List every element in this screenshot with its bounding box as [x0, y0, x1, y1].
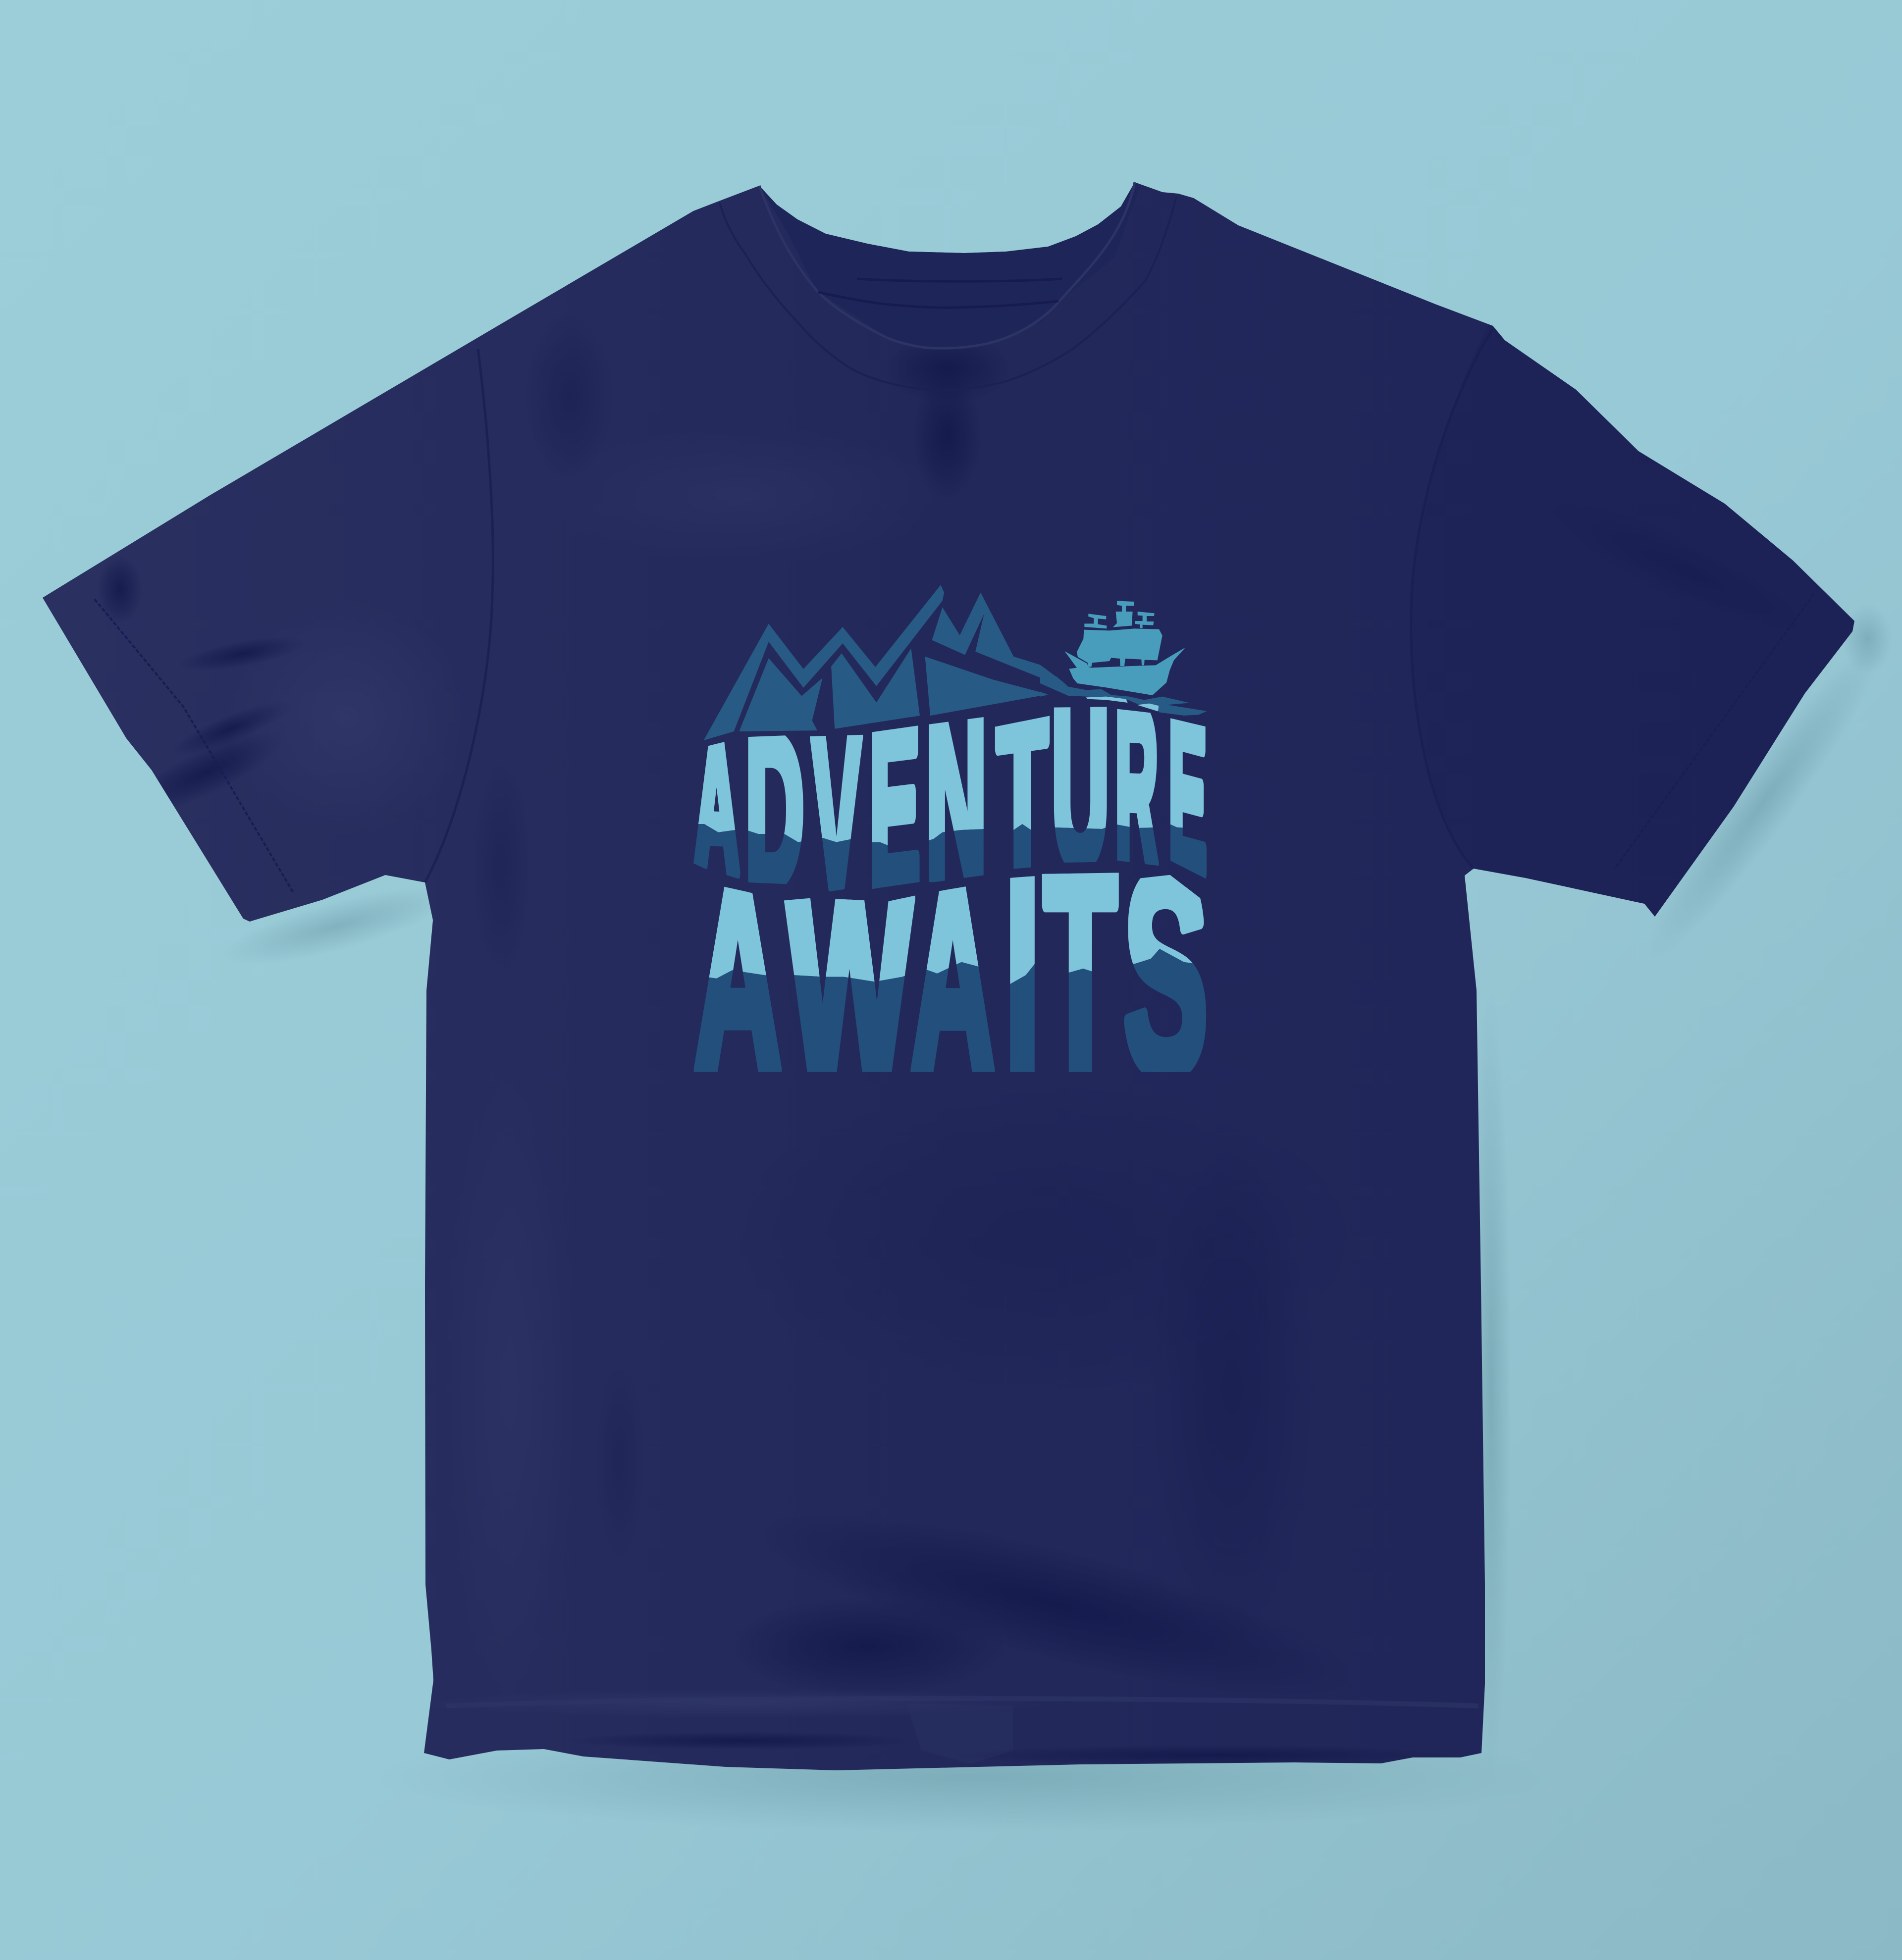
- ADVENTURE light upper half: E: [869, 677, 920, 936]
- right sleeve darker panel: [1411, 297, 1882, 941]
- ADVENTURE light upper half: U: [1052, 659, 1109, 912]
- neck interior: [759, 182, 1139, 348]
- ADVENTURE dark lower half: E: [869, 677, 920, 936]
- ADVENTURE light upper half: R: [1115, 662, 1158, 913]
- AWAITS dark lower half: [694, 811, 1208, 1133]
- ADVENTURE light upper half: E: [1168, 671, 1207, 919]
- AWAITS light upper half: A: [694, 830, 782, 1126]
- ADVENTURE light upper half: [693, 659, 1207, 938]
- ADVENTURE dark lower half: V: [812, 688, 861, 938]
- ADVENTURE light upper half: T: [997, 671, 1048, 918]
- t-shirt: [43, 182, 1882, 1770]
- ADVENTURE light upper half: V: [812, 688, 861, 938]
- AWAITS dark lower half: S: [1123, 815, 1208, 1133]
- ADVENTURE dark lower half: R: [1115, 662, 1158, 913]
- ADVENTURE light upper half: D: [745, 691, 804, 928]
- ADVENTURE dark lower half: U: [1052, 659, 1109, 912]
- ADVENTURE light upper half: A: [693, 702, 740, 913]
- ADVENTURE dark lower half: [693, 659, 1207, 938]
- hem stitching: [446, 1699, 1479, 1706]
- AWAITS dark lower half: A: [694, 830, 782, 1126]
- heading: ADVENTURE: [693, 659, 1207, 938]
- AWAITS dark lower half: T: [1044, 811, 1117, 1131]
- ship silhouette: [1064, 601, 1185, 695]
- hem fold: [906, 1703, 1013, 1764]
- AWAITS dark lower half: W: [787, 844, 913, 1124]
- heading: AWAITS: [694, 811, 1208, 1133]
- foam: [1086, 697, 1159, 712]
- AWAITS dark lower half: A: [911, 830, 995, 1127]
- mountains: [704, 585, 1069, 740]
- graphic print: Adventure Awaits: [693, 585, 1208, 1133]
- sleeve seams: [95, 594, 1814, 893]
- AWAITS light upper half: W: [787, 844, 913, 1124]
- AWAITS light upper half: S: [1123, 815, 1208, 1133]
- AWAITS light upper half: A: [911, 830, 995, 1127]
- AWAITS light upper half: T: [1044, 811, 1117, 1131]
- armhole seams: [425, 329, 1492, 882]
- collar inner edge: [759, 182, 1135, 348]
- AWAITS dark lower half: I: [1005, 816, 1040, 1131]
- waves: [1040, 669, 1207, 716]
- ADVENTURE dark lower half: E: [1168, 671, 1207, 919]
- back collar stitching: [818, 279, 1062, 308]
- ADVENTURE dark lower half: D: [745, 691, 804, 928]
- shirt drop shadow: [215, 604, 1902, 1832]
- ADVENTURE light upper half: N: [926, 668, 987, 930]
- ADVENTURE dark lower half: N: [926, 668, 987, 930]
- fabric folds and shading: [98, 297, 1882, 1766]
- AWAITS light upper half: [694, 811, 1208, 1133]
- collar ribbing band: [720, 197, 1176, 390]
- shirt body: [43, 182, 1854, 1770]
- ADVENTURE dark lower half: A: [693, 702, 740, 913]
- AWAITS light upper half: I: [1005, 816, 1040, 1131]
- ship and waves: [1040, 601, 1207, 716]
- ADVENTURE dark lower half: T: [997, 671, 1048, 918]
